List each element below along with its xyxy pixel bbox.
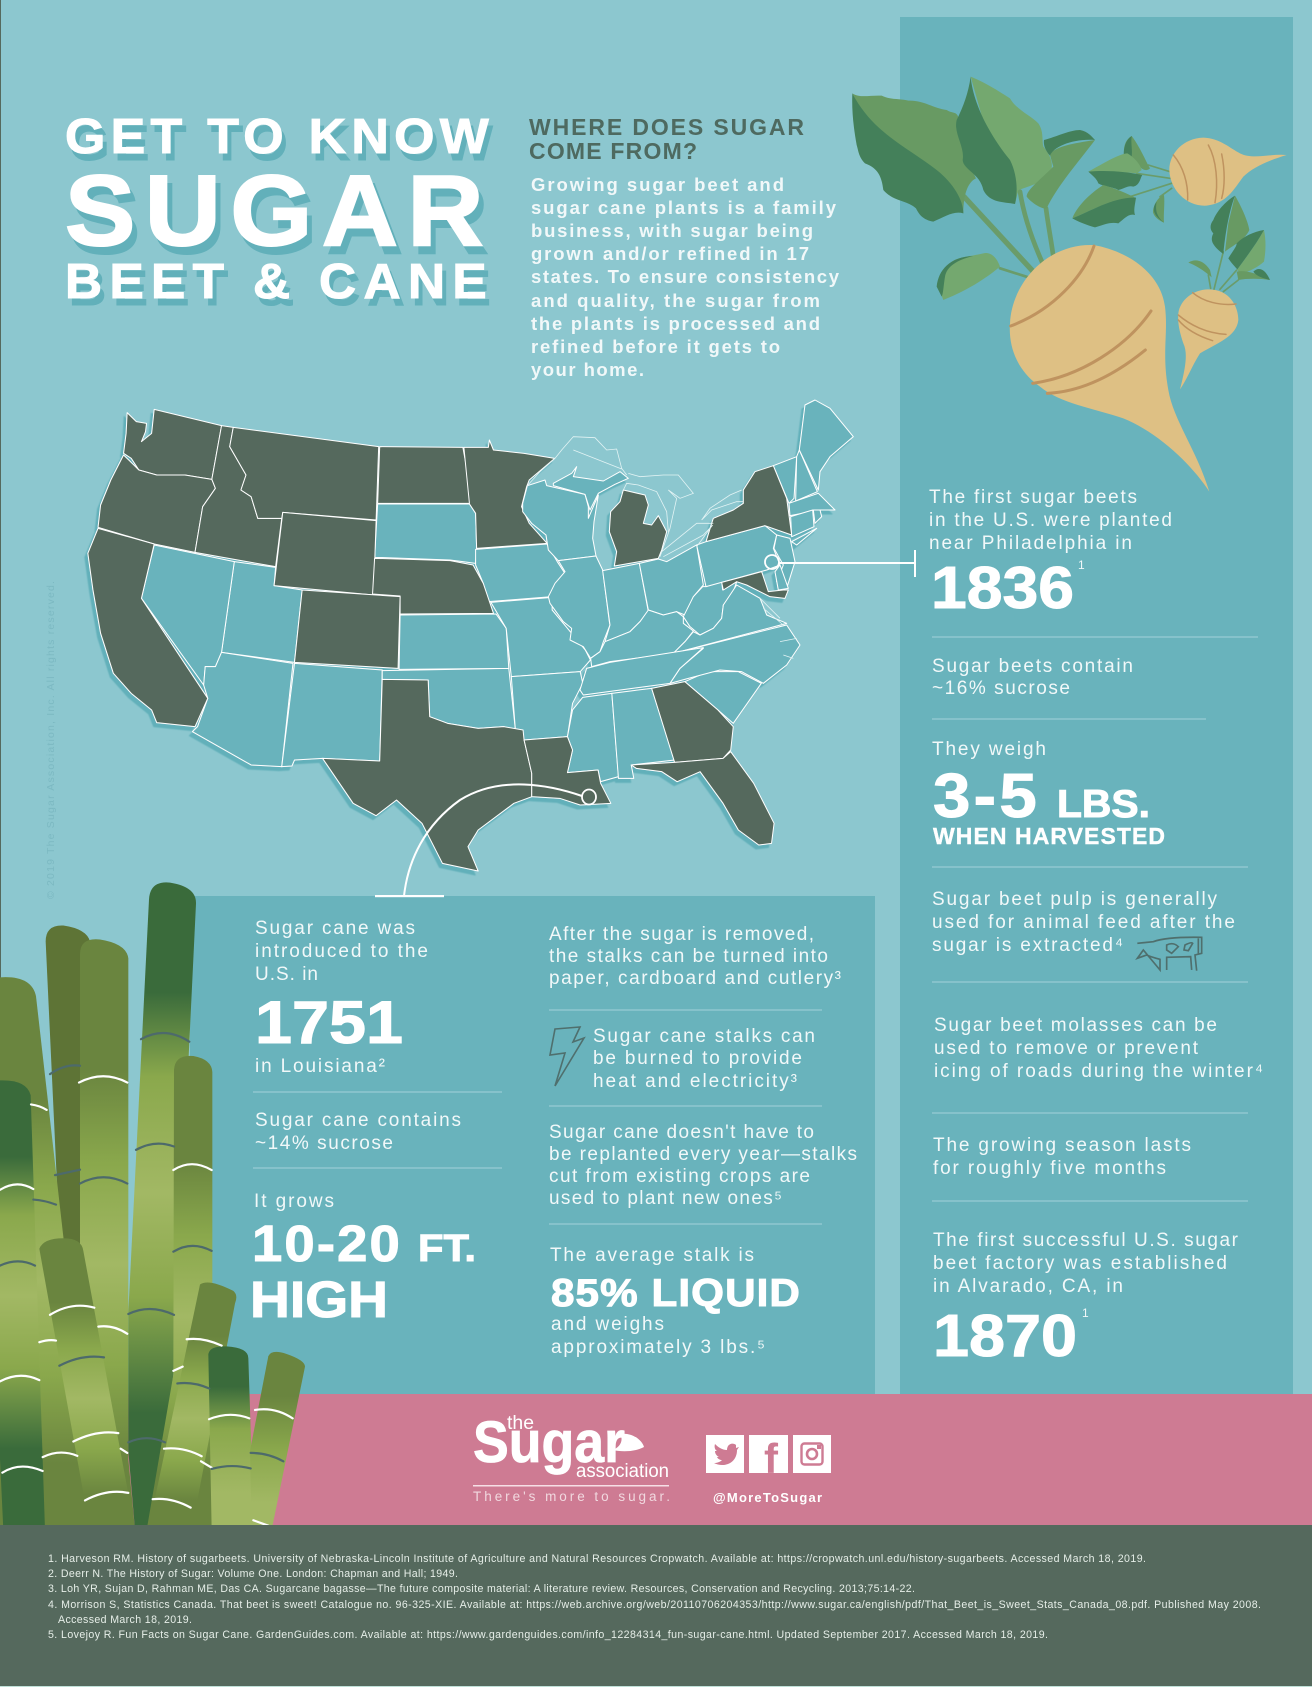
cane fact: liquid: and weighs (551, 1314, 664, 1335)
cane fact: introduced 1751: in Louisiana² (255, 1056, 385, 1077)
title: SUGAR (70, 163, 498, 275)
great lakes outlines (527, 437, 797, 658)
beet fact: sucrose: Sugar beets contain (932, 656, 1133, 677)
eastern states (523, 400, 853, 695)
beet fact: first planted 1836: 1836 (931, 555, 1074, 621)
heading: where does sugar come from: WHERE DOES SUGAR (529, 114, 804, 140)
beet fact: first factory 1870: in Alvarado, CA, in (933, 1276, 1123, 1297)
beet fact: first factory 1870: The first successful U.S. sugar (933, 1230, 1239, 1251)
beet fact: pulp: Sugar beet pulp is generally (932, 889, 1218, 910)
icon: instagram (793, 1435, 831, 1473)
large beet rings (1011, 246, 1151, 393)
beet fact: molasses: used to remove or prevent (934, 1038, 1199, 1059)
title: GET TO KNOW (65, 110, 494, 164)
cane fact: introduced 1751: U.S. in (255, 964, 318, 985)
slate nodes (0, 1033, 283, 1469)
cane fact: height (250, 1191, 476, 1328)
cane fact: electricity (593, 1026, 815, 1092)
intro text block: grown and/or refined in 17 (531, 243, 809, 264)
beet fact: growing season: for roughly five months (933, 1158, 1166, 1179)
cane fact: introduced 1751: Sugar cane was (255, 918, 415, 939)
beet fact: growing season (933, 1135, 1191, 1179)
beet fact: first planted 1836: near Philadelphia in (929, 533, 1132, 554)
beet fact: first factory 1870: 1870 (933, 1303, 1077, 1369)
cane fact: liquid: The average stalk is (550, 1245, 754, 1266)
beet fact: first planted 1836: The first sugar beets (929, 487, 1137, 508)
callout: Philadelphia connector (765, 550, 916, 577)
social handle: @MoreToSugar (713, 1490, 822, 1505)
cane fact: introduced 1751: introduced to the (255, 941, 428, 962)
beet fact: weight: They weigh (932, 739, 1046, 760)
footer references: 2. Deerr N. The History of Sugar: Volume One. London: Chapman and Hall; 1949. (48, 1568, 458, 1580)
cane fact: electricity: Sugar cane stalks can (593, 1026, 815, 1047)
small beet leaves lower (1188, 196, 1270, 280)
US map with sugar producing states highlighted (88, 400, 853, 871)
icon: facebook: f (764, 1435, 779, 1482)
title: BEET & CANE (65, 255, 494, 309)
footer references: 5. Lovejoy R. Fun Facts on Sugar Cane. GardenGuides.com. Available at: https://www.gardenguides.com/info_12284314_fun-sugar-cane.html. Updated September 2017. Accessed March 18, 2019. (48, 1629, 1048, 1641)
icon: cow (1137, 937, 1202, 971)
title (65, 110, 498, 316)
copyright vertical text: © 2019 The Sugar Association, Inc. All rights reserved. (45, 581, 57, 899)
cane fact: replanting: be replanted every year—stalks (549, 1144, 857, 1165)
cane fact: height: 10-20 (252, 1215, 402, 1272)
beet fact: first planted 1836: in the U.S. were planted (929, 510, 1172, 531)
intro text block (531, 174, 840, 380)
logo: The Sugar Association: Sugar (473, 1410, 625, 1475)
intro text block: and quality, the sugar from (531, 290, 820, 311)
intro text block: sugar cane plants is a family (531, 197, 837, 218)
intro text block: business, with sugar being (531, 220, 813, 241)
western and southern states (88, 409, 774, 871)
leaf lower left (937, 253, 1000, 300)
beet fact: molasses: Sugar beet molasses can be (934, 1015, 1217, 1036)
illustration: sugar beets (852, 77, 1287, 492)
stalk far right slanted (250, 1352, 305, 1530)
footer background (0, 1525, 1312, 1686)
small beet lower right (1178, 289, 1238, 389)
beet fact: first factory 1870: beet factory was established (933, 1253, 1227, 1274)
beet fact: sucrose (932, 656, 1133, 699)
stalk right (147, 1056, 212, 1530)
stalk center left slanted (39, 1238, 135, 1530)
stalk back dark olive (46, 926, 90, 1249)
cane fact: electricity: be burned to provide (593, 1048, 802, 1069)
intro text block: refined before it gets to (531, 336, 780, 357)
cane fact: sucrose: ~14% sucrose (255, 1133, 393, 1154)
footer references: 4. Morrison S, Statistics Canada. That beet is sweet! Catalogue no. 96-325-XIE. Available at: https://web.archive.org/web/20110706204353/http://www.sugar.ca/english/pdf/That_Beet_is_Sweet_Stats_Canada_08.pdf. Published May 2008. (48, 1599, 1261, 1611)
icon: lightning bolt (550, 1027, 584, 1086)
cane fact: replanting (549, 1122, 857, 1209)
beet fact: pulp: sugar is extracted⁴ (932, 935, 1123, 956)
dark states west (88, 409, 774, 871)
cane fact: liquid: approximately 3 lbs.⁵ (551, 1337, 765, 1358)
logo: The Sugar Association: There's more to sugar. (473, 1489, 670, 1504)
cane fact: introduced 1751: 1751 (255, 989, 403, 1056)
pink logo band (0, 1394, 1312, 1525)
beet fact: weight: LBS. (1057, 783, 1150, 826)
white nodes (0, 1076, 293, 1526)
intro text block: the plants is processed and (531, 313, 820, 334)
dark states east (609, 466, 792, 598)
cane fact: by-products: the stalks can be turned into (549, 946, 828, 967)
footer references: 1. Harveson RM. History of sugarbeets. University of Nebraska-Lincoln Institute of Agriculture and Natural Resources Cropwatch. Available at: https://cropwatch.unl.edu/history-sugarbeets. Accessed March 18, 2019. (48, 1553, 1146, 1565)
panel: sugar cane facts background (190, 896, 875, 1395)
beet fact: sucrose: ~16% sucrose (932, 678, 1070, 699)
logo: The Sugar Association: association (576, 1461, 669, 1482)
beet fact: first planted 1836: 1 (1078, 558, 1085, 572)
beet fact: weight: WHEN HARVESTED (933, 823, 1165, 849)
large leaf left (852, 93, 976, 222)
small beet rings (1173, 145, 1224, 203)
intro text block: states. To ensure consistency (531, 266, 840, 287)
leaf right of large beet (1027, 130, 1095, 209)
logo: The Sugar Association: the (507, 1413, 534, 1434)
stems of large beet (964, 165, 1238, 292)
cane fact: sucrose: Sugar cane contains (255, 1110, 461, 1131)
small beet top right (1169, 138, 1287, 206)
light states west (141, 504, 761, 782)
icon: twitter (706, 1435, 744, 1473)
heading: where does sugar come from: COME FROM? (529, 138, 697, 164)
logo: The Sugar Association (473, 1410, 670, 1504)
cane fact: introduced 1751 (255, 918, 428, 1077)
beet fact: weight (932, 739, 1165, 849)
illustration: sugar cane stalks (0, 882, 305, 1530)
stalk center tall (128, 882, 196, 1530)
small beet leaves top (1072, 136, 1164, 227)
callout: Louisiana connector (375, 784, 596, 897)
intro text block: Growing sugar beet and (531, 174, 784, 195)
cane fact: liquid: 85% LIQUID (551, 1272, 801, 1315)
icon: facebook (749, 1435, 788, 1482)
beet fact: growing season: The growing season lasts (933, 1135, 1191, 1156)
large beet body (1010, 245, 1209, 492)
title: GET TO KNOW (69, 117, 498, 171)
stalk front left dark (0, 1080, 45, 1530)
cane fact: by-products: After the sugar is removed, (549, 924, 814, 945)
beet fact: first factory 1870: 1 (1082, 1306, 1089, 1320)
cane fact: liquid (550, 1245, 801, 1358)
heading: where does sugar come from (529, 114, 804, 164)
cane fact: by-products: paper, cardboard and cutlery³ (549, 968, 841, 989)
beet fact: molasses (934, 1015, 1263, 1082)
footer references (48, 1553, 1261, 1641)
stalk far left (0, 977, 97, 1530)
footer references: 3. Loh YR, Sujan D, Rahman ME, Das CA. Sugarcane bagasse—The future composite material: A literature review. Resources, Conservation and Recycling. 2013;75:14-22. (48, 1583, 915, 1595)
beet fact: pulp: used for animal feed after the (932, 912, 1235, 933)
cane fact: replanting: Sugar cane doesn't have to (549, 1122, 814, 1143)
footer references: Accessed March 18, 2019. (58, 1614, 192, 1626)
stalk front olive (80, 939, 135, 1530)
intro text block: your home. (531, 359, 644, 380)
cane fact: height: It grows (254, 1191, 334, 1212)
large leaf middle (956, 77, 1052, 204)
cane fact: by-products (549, 924, 841, 989)
cane fact: replanting: used to plant new ones⁵ (549, 1188, 782, 1209)
stalk small dark (208, 1346, 254, 1530)
stalk right slanted (148, 1282, 236, 1530)
beet fact: pulp (932, 889, 1235, 956)
cane fact: height: FT. (418, 1228, 476, 1270)
beet fact: first factory 1870 (933, 1230, 1239, 1369)
beet fact: molasses: icing of roads during the winter⁴ (934, 1061, 1263, 1082)
title: BEET & CANE (69, 262, 498, 316)
cane fact: sucrose (255, 1110, 461, 1154)
cane fact: replanting: cut from existing crops are (549, 1166, 810, 1187)
title: SUGAR (65, 155, 493, 267)
light states east (523, 400, 853, 695)
beet fact: weight: 3-5 (933, 762, 1040, 831)
panel: sugar beet facts background (900, 17, 1293, 1395)
cane fact: electricity: heat and electricity³ (593, 1071, 797, 1092)
beet fact: first planted 1836 (929, 487, 1172, 621)
lower small beet rings (1178, 293, 1236, 341)
cane fact: height: HIGH (250, 1271, 388, 1328)
